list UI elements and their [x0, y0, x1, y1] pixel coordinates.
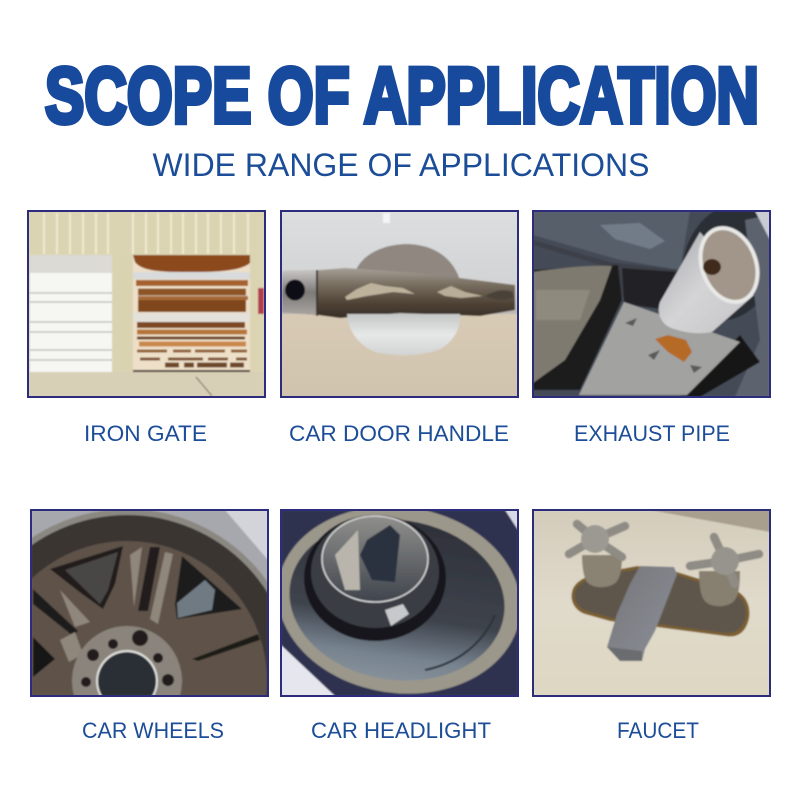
label: iron gate: IRON GATE [84, 421, 207, 446]
label: car door handle: CAR DOOR HANDLE [289, 421, 509, 446]
subtitle: WIDE RANGE OF APPLICATIONS [152, 147, 650, 183]
panel: car headlight [280, 509, 519, 697]
panel: car door handle [281, 211, 518, 397]
label: car wheels: CAR WHEELS [82, 718, 224, 743]
panel: iron gate [28, 211, 265, 397]
label: car headlight: CAR HEADLIGHT [311, 718, 491, 743]
panel: car wheels [31, 509, 268, 696]
panel: exhaust pipe [532, 210, 771, 398]
label: faucet: FAUCET [617, 718, 699, 743]
panel: faucet [533, 510, 770, 696]
label: exhaust pipe: EXHAUST PIPE [574, 421, 730, 446]
